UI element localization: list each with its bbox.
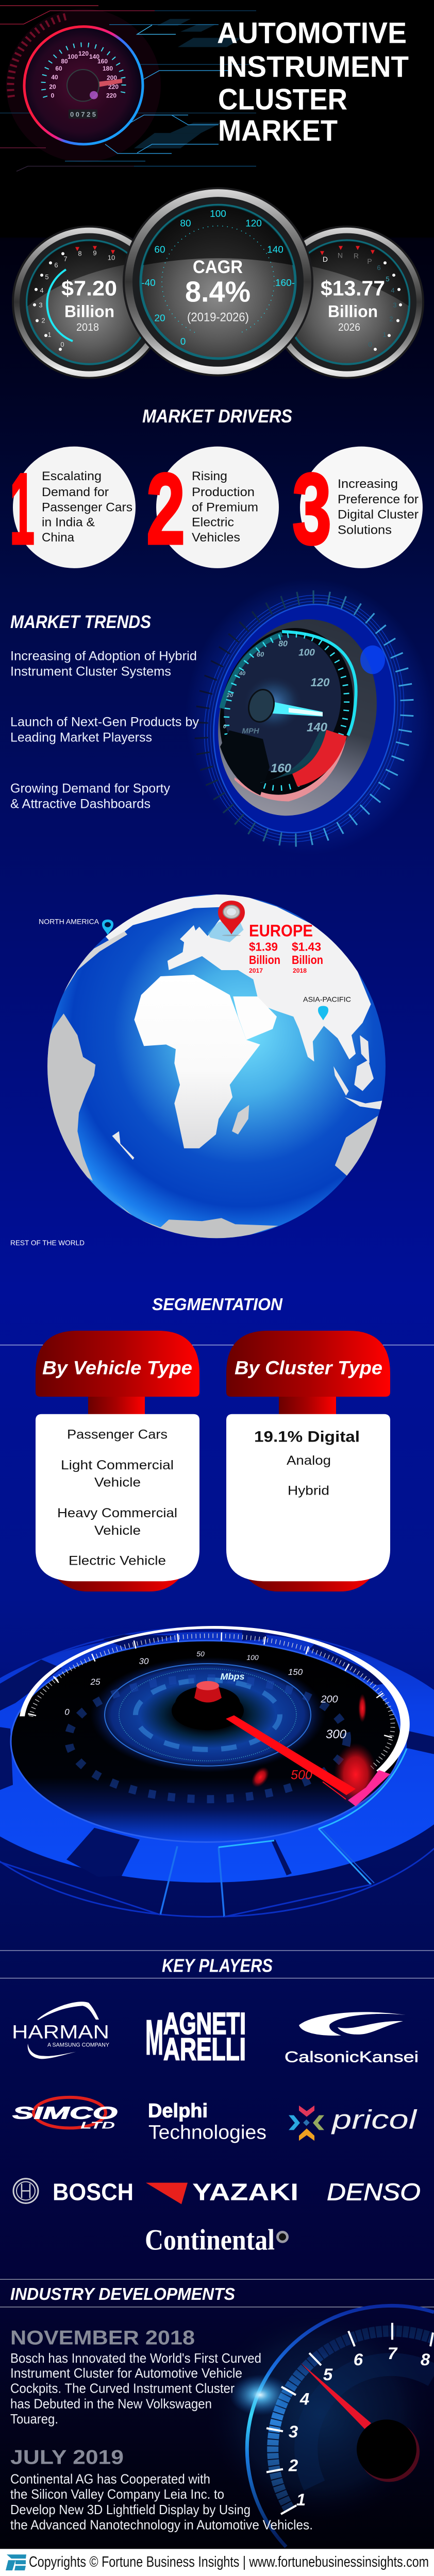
driver 1: Escalating xyxy=(42,469,102,483)
gauge: 2026 market value: 6 xyxy=(377,264,381,272)
logo: Simco xyxy=(12,2097,118,2131)
development: November 2018: Bosch has Innovated the World's First Curved xyxy=(10,2351,261,2366)
illustration: blue 3D speedometer: 120 xyxy=(311,676,329,689)
logo: Simco: SIMCO xyxy=(12,2104,118,2123)
driver 1: 1 xyxy=(10,452,35,565)
gauge: 2018 market value: 5 xyxy=(45,273,49,281)
panel: by vehicle type: Vehicle xyxy=(94,1476,141,1490)
hero speedometer illustration: 200 xyxy=(107,74,117,81)
hero speedometer illustration: 140 xyxy=(89,53,99,60)
driver 1 xyxy=(10,447,136,568)
illustration: blue 3D speedometer: 140 xyxy=(307,721,328,734)
hero speedometer illustration: 0 xyxy=(51,92,55,99)
panel: by vehicle type: Electric Vehicle xyxy=(69,1554,166,1568)
gauge: 2026 market value: 3 xyxy=(393,301,397,309)
illustration: blue 3D speedometer: 60 xyxy=(257,651,264,658)
illustration: tachometer: 3 xyxy=(289,2422,298,2441)
panel: by vehicle type: Passenger Cars xyxy=(67,1427,168,1442)
hero speedometer illustration: 20 xyxy=(49,83,56,91)
gauge: 2026 market value xyxy=(286,226,424,379)
heading: segmentation: SEGMENTATION xyxy=(152,1295,283,1314)
label: Asia-Pacific with pin xyxy=(303,996,351,1020)
callout: Europe values: 2018 xyxy=(293,967,307,974)
gauge: 2018 market value: 9 xyxy=(93,249,97,257)
gauge: 2018 market value: 8 xyxy=(78,249,82,257)
illustration: blue 3D speedometer: MPH xyxy=(242,727,260,735)
illustration: blue 3D speedometer: 0 xyxy=(223,724,226,730)
driver 2: Rising xyxy=(192,469,227,483)
panel: by cluster type: By Cluster Type xyxy=(235,1357,382,1378)
panel: by vehicle type: Light Commercial xyxy=(61,1458,174,1472)
driver 1: China xyxy=(42,531,75,545)
market trends list: Leading Market Playerss xyxy=(10,730,152,744)
driver 3: Increasing xyxy=(338,477,398,491)
heading: market drivers: MARKET DRIVERS xyxy=(142,406,292,427)
illustration: tachometer: 6 xyxy=(354,2350,363,2369)
callout: Europe values: Billion xyxy=(249,953,280,967)
gauge: CAGR: CAGR xyxy=(193,257,243,277)
logo: Delphi Technologies xyxy=(148,2100,266,2143)
gauge: 2018 market value: 3 xyxy=(39,301,43,309)
development: November 2018: NOVEMBER 2018 xyxy=(10,2327,195,2349)
gauge: 2018 market value: $7.20 xyxy=(61,277,117,300)
title: AUTOMOTIVE xyxy=(217,17,407,49)
illustration: blue 3D speedometer: 20 xyxy=(226,692,233,699)
illustration: Mbps speedometer: 500 xyxy=(291,1768,312,1782)
label: Rest of the World: REST OF THE WORLD xyxy=(10,1239,85,1247)
development: July 2019: the Advanced Nanotechnology in Automotive Vehicles. xyxy=(10,2518,313,2533)
driver 2: 2 xyxy=(146,452,185,565)
gauge: 2026 market value: 0 xyxy=(368,341,372,348)
hero speedometer illustration: 180 xyxy=(103,65,113,72)
heading: key players: KEY PLAYERS xyxy=(162,1956,273,1976)
logo: Delphi Technologies: Delphi xyxy=(148,2100,208,2122)
driver 3: Solutions xyxy=(338,523,392,537)
hero speedometer illustration: 40 xyxy=(51,74,58,81)
callout: Europe values: EUROPE xyxy=(249,921,313,940)
hero speedometer illustration: 120 xyxy=(78,50,89,57)
gauge: 2026 market value: Billion xyxy=(328,302,378,320)
development: July 2019: Continental AG has Cooperated with xyxy=(10,2472,210,2486)
logo: Harman: HARMAN xyxy=(12,2022,109,2043)
market trends list xyxy=(10,649,199,811)
driver 2 xyxy=(146,447,279,568)
illustration: Mbps speedometer xyxy=(0,1626,434,1917)
gauge: 2026 market value: 1 xyxy=(382,331,387,338)
illustration: blue 3D speedometer: 100 xyxy=(298,648,315,658)
hero speedometer illustration: 220 xyxy=(106,92,116,99)
illustration: Mbps speedometer: 100 xyxy=(246,1653,259,1662)
driver 1: in India & xyxy=(42,516,95,529)
driver 3: Preference for xyxy=(338,493,419,506)
illustration: blue 3D speedometer: 160 xyxy=(271,761,292,775)
illustration: tachometer: 4 xyxy=(299,2389,309,2408)
gauge: 2018 market value: 10 xyxy=(108,253,115,261)
illustration: Mbps speedometer: 0 xyxy=(64,1707,70,1717)
logo: Simco: LTD xyxy=(80,2120,115,2131)
panel: by cluster type: Analog xyxy=(287,1453,331,1468)
development: November 2018: Instrument Cluster for Automotive Vehicle xyxy=(10,2366,242,2381)
driver 3 xyxy=(292,447,423,568)
logo: Calsonic Kansei xyxy=(285,2012,419,2065)
market trends list: Increasing of Adoption of Hybrid xyxy=(10,649,197,663)
label: Asia-Pacific with pin: ASIA-PACIFIC xyxy=(303,996,351,1004)
logo: Harman: A SAMSUNG COMPANY xyxy=(47,2042,110,2048)
illustration: tachometer: 1 xyxy=(296,2490,306,2509)
gauge: 2018 market value: Billion xyxy=(64,302,114,320)
development: July 2019: Develop New 3D Lightfield Display by Using xyxy=(10,2503,251,2517)
gauge: 2026 market value: 5 xyxy=(386,275,390,283)
logo: Calsonic Kansei: CalsonicKansei xyxy=(285,2048,419,2065)
panel: by cluster type: 19.1% Digital xyxy=(254,1428,360,1445)
driver 3: 3 xyxy=(292,452,331,565)
gauge: CAGR: 8.4% xyxy=(185,276,251,309)
illustration: blue 3D speedometer: 40 xyxy=(239,670,245,676)
panel: by cluster type: Hybrid xyxy=(288,1484,329,1498)
market trends list: Instrument Cluster Systems xyxy=(10,664,171,679)
label: North America with pin: NORTH AMERICA xyxy=(39,918,99,926)
gauge: CAGR: 0 xyxy=(180,336,186,347)
driver 1: Passenger Cars xyxy=(42,501,132,515)
title: INSTRUMENT xyxy=(218,50,409,83)
market trends list: Growing Demand for Sporty xyxy=(10,782,171,796)
logo: Yazaki: YAZAKI xyxy=(192,2179,298,2205)
gauge: CAGR: 80 xyxy=(180,218,191,229)
logo: Continental: Continental xyxy=(145,2224,275,2257)
illustration: tachometer: 5 xyxy=(323,2365,333,2384)
gauge: 2018 market value xyxy=(12,226,151,379)
callout: Europe values xyxy=(249,921,323,974)
illustration: Mbps speedometer: 30 xyxy=(139,1656,149,1666)
gauge: CAGR: 60 xyxy=(154,244,165,255)
illustration: tachometer: 8 xyxy=(421,2350,430,2369)
gauge: 2018 market value: 6 xyxy=(54,261,58,269)
gauge: 2018 market value: 2 xyxy=(41,316,45,324)
gauge: 2018 market value: 4 xyxy=(40,286,44,294)
driver 3: Digital Cluster xyxy=(338,508,419,522)
development: November 2018: Touareg. xyxy=(10,2412,58,2427)
title xyxy=(217,17,409,147)
logo: Magneti Marelli: M xyxy=(145,2010,163,2065)
logo: Delphi Technologies: Technologies xyxy=(148,2122,266,2143)
panel: by vehicle type: By Vehicle Type xyxy=(42,1357,192,1378)
callout: Europe values: Billion xyxy=(292,953,323,967)
globe xyxy=(42,893,386,1244)
market trends list: & Attractive Dashboards xyxy=(10,796,151,811)
logo: Harman xyxy=(12,2002,110,2059)
gauge: 2026 market value: $13.77 xyxy=(321,277,385,300)
illustration: blue 3D speedometer xyxy=(175,573,433,864)
label: North America with pin xyxy=(39,918,113,935)
title: MARKET xyxy=(218,114,338,147)
callout: Europe values: 2017 xyxy=(249,967,263,974)
gauge: 2026 market value: 4 xyxy=(391,286,395,294)
gauge: 2026 market value: 2026 xyxy=(338,321,360,333)
gauge: 2026 market value: 2 xyxy=(389,315,393,323)
logo: Magneti Marelli xyxy=(145,2006,246,2067)
illustration: Mbps speedometer: 150 xyxy=(288,1667,303,1677)
gauge: CAGR xyxy=(123,187,313,377)
callout: Europe values: $1.43 xyxy=(292,940,321,953)
gauge: 2026 market value: P xyxy=(367,257,372,265)
development: November 2018: has Debuted in the New Volkswagen xyxy=(10,2397,212,2411)
hero speedometer illustration: 80 xyxy=(61,58,68,65)
heading: industry developments: INDUSTRY DEVELOPMENTS xyxy=(10,2284,235,2304)
illustration: Mbps speedometer: 200 xyxy=(320,1694,338,1705)
title: CLUSTER xyxy=(218,83,347,116)
illustration: Mbps speedometer: 50 xyxy=(196,1650,205,1658)
logo: Magneti Marelli: AGNETI xyxy=(163,2006,246,2041)
developments rules xyxy=(0,2279,434,2307)
driver 1: Demand for xyxy=(42,485,109,499)
gauge: 2018 market value: 1 xyxy=(47,331,52,338)
illustration: tachometer: 2 xyxy=(288,2456,298,2475)
development: November 2018: Cockpits. The Curved Instrument Cluster xyxy=(10,2382,235,2396)
key players rules xyxy=(0,1951,434,1978)
panel: by cluster type xyxy=(226,1331,390,1591)
driver 2: Production xyxy=(192,485,255,499)
gauge: 2018 market value: 0 xyxy=(60,341,64,348)
illustration: tachometer: 7 xyxy=(388,2344,398,2363)
development: November 2018 xyxy=(10,2327,261,2427)
logo: Denso: DENSO xyxy=(327,2179,421,2205)
hero speedometer illustration: 00725 xyxy=(70,110,96,118)
hero speedometer illustration: 100 xyxy=(68,53,78,60)
hero speedometer illustration xyxy=(0,6,256,172)
driver 2: of Premium xyxy=(192,501,258,515)
logo: Yazaki xyxy=(146,2179,298,2205)
gauge: 2026 market value: R xyxy=(354,251,359,260)
panel: by vehicle type xyxy=(36,1331,199,1591)
hero speedometer illustration: 160 xyxy=(97,58,108,65)
gauge: 2018 market value: 2018 xyxy=(76,321,99,333)
gauge: 2026 market value: N xyxy=(338,251,343,259)
gauge: CAGR: 120 xyxy=(245,218,262,229)
market trends list: Launch of Next-Gen Products by xyxy=(10,715,199,730)
icon: Europe map pin xyxy=(218,901,245,936)
heading: market trends: MARKET TRENDS xyxy=(10,612,151,632)
gauge: 2026 market value: D xyxy=(323,255,328,263)
illustration: Mbps speedometer: Mbps xyxy=(221,1671,245,1682)
hero speedometer illustration: 60 xyxy=(55,65,62,72)
panel: by vehicle type: Vehicle xyxy=(94,1523,141,1538)
gauge: CAGR: 100 xyxy=(210,209,226,219)
callout: Europe values: $1.39 xyxy=(249,940,278,953)
development: July 2019 xyxy=(10,2447,313,2533)
development: July 2019: the Silicon Valley Company Leia Inc. to xyxy=(10,2487,224,2502)
illustration: Mbps speedometer: 25 xyxy=(90,1677,101,1687)
logo: Magneti Marelli: ARELLI xyxy=(163,2032,246,2067)
driver 2: Electric xyxy=(192,516,234,529)
gauge: CAGR: -40 xyxy=(141,278,156,289)
gauge: CAGR: 140 xyxy=(267,244,283,255)
footer xyxy=(0,2549,434,2576)
hero speedometer illustration: 220 xyxy=(108,83,119,91)
development: July 2019: JULY 2019 xyxy=(10,2447,124,2469)
illustration: tachometer xyxy=(205,2306,434,2547)
illustration: Mbps speedometer: 300 xyxy=(326,1727,347,1741)
gauge: CAGR: 20 xyxy=(154,313,165,324)
logo: Bosch xyxy=(13,2179,133,2205)
gauge: CAGR: 160- xyxy=(275,278,295,289)
panel: by vehicle type: Heavy Commercial xyxy=(57,1506,177,1520)
logo: Bosch: BOSCH xyxy=(53,2179,133,2205)
gauge: CAGR: (2019-2026) xyxy=(187,310,249,324)
segmentation rule xyxy=(0,1345,434,1346)
illustration: blue 3D speedometer: 80 xyxy=(278,640,288,649)
gauge: 2018 market value: 7 xyxy=(63,255,68,263)
logo: Pricol xyxy=(289,2105,418,2141)
driver 2: Vehicles xyxy=(192,531,240,545)
logo: Pricol: pricol xyxy=(330,2105,418,2134)
